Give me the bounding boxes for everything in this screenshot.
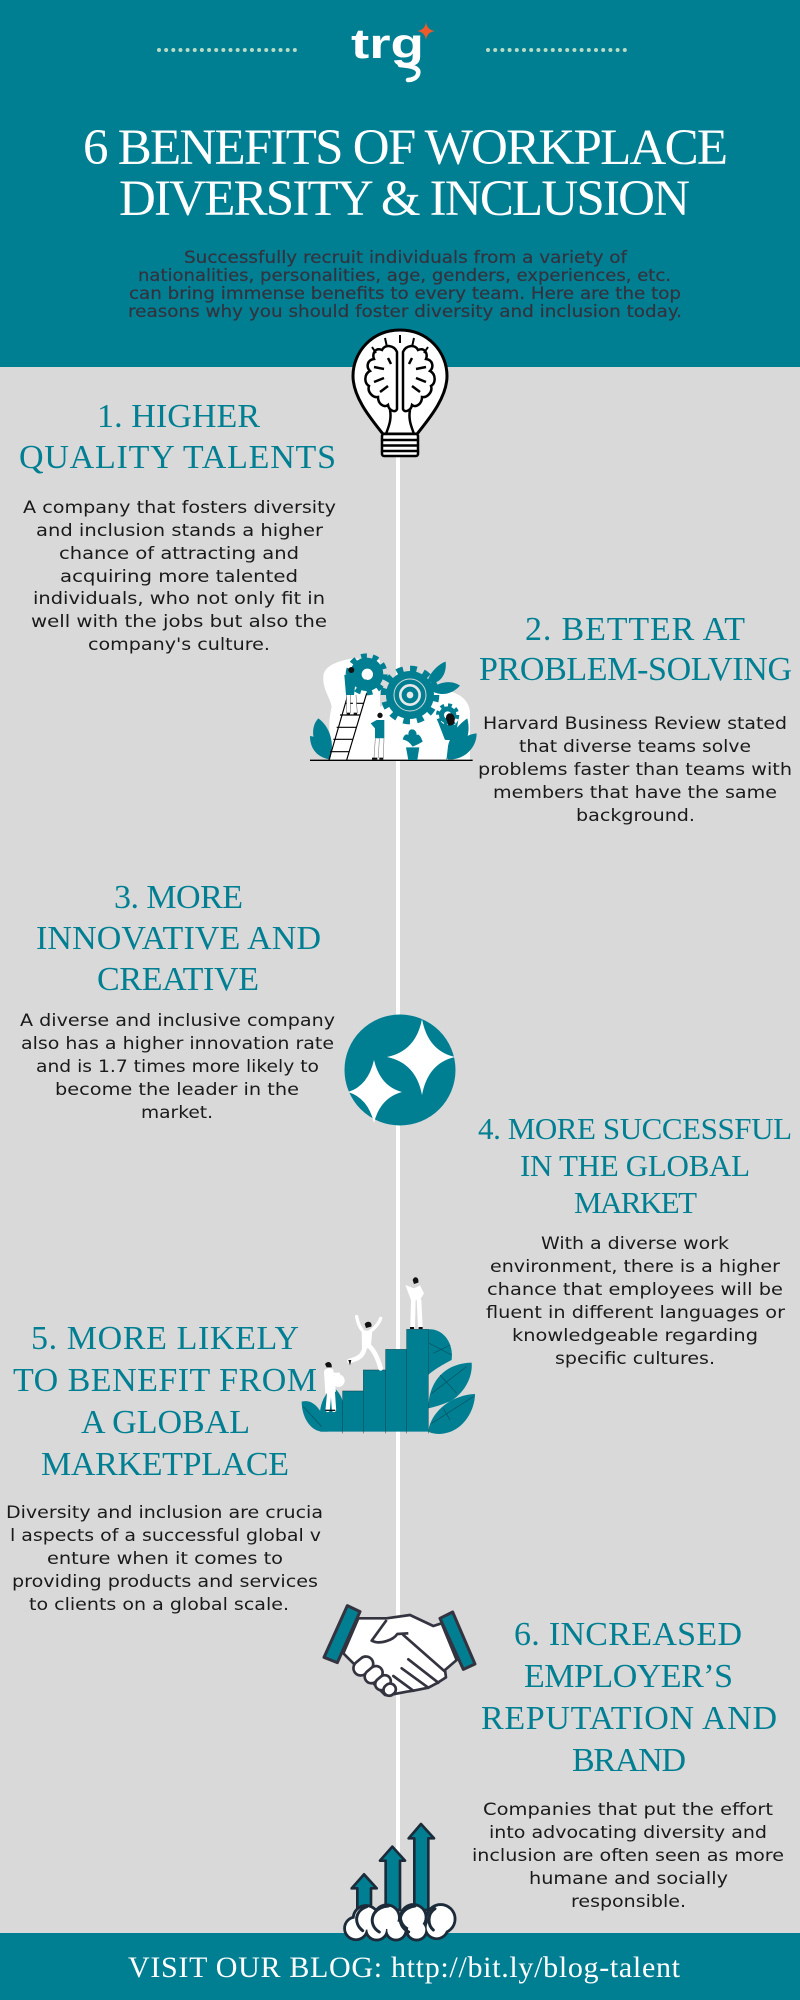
footer link text: VISIT OUR BLOG: http://bit.ly/blog-talent <box>128 1951 681 1984</box>
icon: handshake <box>324 1606 475 1698</box>
footer band <box>0 1933 800 2000</box>
body text 1: chance of attracting and <box>59 544 299 564</box>
intro text: can bring immense benefits to every team. Here are the top <box>129 284 681 304</box>
heading 4: IN THE GLOBAL <box>520 1148 750 1183</box>
panel: benefit 6 <box>472 1616 784 1912</box>
body text 3: become the leader in the <box>55 1080 299 1100</box>
logo: trg <box>351 20 435 80</box>
body text 4: chance that employees will be <box>487 1280 783 1300</box>
icon: people and gears <box>310 640 477 760</box>
panel: benefit 1 <box>19 398 336 655</box>
icon: sparkle circle <box>344 1014 456 1126</box>
heading 6 <box>481 1616 777 1779</box>
body text 4: knowledgeable regarding <box>512 1326 758 1346</box>
panel: benefit 2 <box>478 611 792 826</box>
body text 2: that diverse teams solve <box>519 737 751 757</box>
body text 1: well with the jobs but also the <box>31 612 327 632</box>
body text 3 <box>20 1011 335 1123</box>
dotted rule left <box>159 48 295 52</box>
heading 5: A GLOBAL <box>81 1404 250 1441</box>
title: DIVERSITY & INCLUSION <box>119 171 690 227</box>
icon: growth arrows over cloud <box>345 1824 455 1940</box>
body text 3: and is 1.7 times more likely to <box>36 1057 319 1077</box>
body text 6: Companies that put the effort <box>483 1800 773 1820</box>
body text 4: environment, there is a higher <box>490 1257 780 1277</box>
heading 1: 1. HIGHER <box>97 398 260 435</box>
heading 5: 5. MORE LIKELY <box>31 1320 299 1357</box>
body text 5: l aspects of a successful global v <box>10 1526 321 1546</box>
body text 3: market. <box>141 1103 213 1123</box>
body text 5: providing products and services <box>12 1572 318 1592</box>
intro text: nationalities, personalities, age, genders, experiences, etc. <box>138 266 671 286</box>
title: 6 BENEFITS OF WORKPLACE <box>83 120 728 176</box>
intro text <box>128 248 682 322</box>
icon: people climbing stairs <box>302 1277 475 1434</box>
body text 2: members that have the same <box>493 783 777 803</box>
heading 4: 4. MORE SUCCESSFUL <box>478 1111 792 1146</box>
heading 4: MARKET <box>574 1185 697 1220</box>
body text 1 <box>23 498 336 655</box>
body text 4 <box>486 1234 785 1369</box>
body text 5: Diversity and inclusion are crucia <box>6 1503 323 1523</box>
heading 5: TO BENEFIT FROM <box>13 1362 317 1399</box>
header band <box>0 0 800 367</box>
heading 5: MARKETPLACE <box>41 1446 289 1483</box>
heading 6: 6. INCREASED <box>514 1616 742 1653</box>
body text 6: humane and socially <box>529 1869 728 1889</box>
body text 1: A company that fosters diversity <box>23 498 336 518</box>
body text 6 <box>472 1800 784 1912</box>
figure: person jumping <box>348 1317 381 1368</box>
heading 2: PROBLEM-SOLVING <box>479 651 792 688</box>
intro text: reasons why you should foster diversity and inclusion today. <box>128 302 682 322</box>
body text 4: With a diverse work <box>541 1234 729 1254</box>
body text 2: Harvard Business Review stated <box>483 714 787 734</box>
heading 6: BRAND <box>572 1742 686 1779</box>
body text 1: acquiring more talented <box>60 567 298 587</box>
logo: trg: trg <box>351 20 424 67</box>
heading 3: INNOVATIVE AND <box>36 920 321 957</box>
heading 4 <box>478 1111 792 1220</box>
heading 3: CREATIVE <box>97 961 259 998</box>
body text 6: into advocating diversity and <box>489 1823 767 1843</box>
body text 2: problems faster than teams with <box>478 760 792 780</box>
heading 6: REPUTATION AND <box>481 1700 777 1737</box>
panel: benefit 4 <box>478 1111 792 1369</box>
heading 1 <box>19 398 336 476</box>
panel: benefit 3 <box>20 879 335 1123</box>
figure: person carrying pot <box>324 1362 345 1411</box>
body text 3: also has a higher innovation rate <box>21 1034 334 1054</box>
heading 2 <box>479 611 792 688</box>
heading 2: 2. BETTER AT <box>525 611 745 648</box>
body text 1: and inclusion stands a higher <box>36 521 323 541</box>
body text 5: to clients on a global scale. <box>29 1595 289 1615</box>
dotted rule right <box>488 48 625 52</box>
body text 4: fluent in different languages or <box>486 1303 785 1323</box>
body text 3: A diverse and inclusive company <box>20 1011 335 1031</box>
title <box>83 120 728 227</box>
body text 4: specific cultures. <box>555 1349 715 1369</box>
figure: person on top <box>405 1277 424 1329</box>
heading 3: 3. MORE <box>114 879 243 916</box>
icon: light bulb with brain <box>353 330 447 456</box>
body text 1: company's culture. <box>88 635 270 655</box>
heading 5 <box>13 1320 317 1483</box>
body text 5 <box>6 1503 323 1615</box>
body text 2 <box>478 714 792 826</box>
body text 1: individuals, who not only fit in <box>33 589 325 609</box>
panel: benefit 5 <box>6 1320 323 1615</box>
heading 6: EMPLOYER’S <box>524 1658 733 1695</box>
body text 6: inclusion are often seen as more <box>472 1846 784 1866</box>
heading 3 <box>36 879 321 998</box>
body text 2: background. <box>576 806 695 826</box>
body text 6: responsible. <box>571 1892 686 1912</box>
intro text: Successfully recruit individuals from a variety of <box>184 248 628 268</box>
heading 1: QUALITY TALENTS <box>19 439 336 476</box>
body text 5: enture when it comes to <box>47 1549 283 1569</box>
